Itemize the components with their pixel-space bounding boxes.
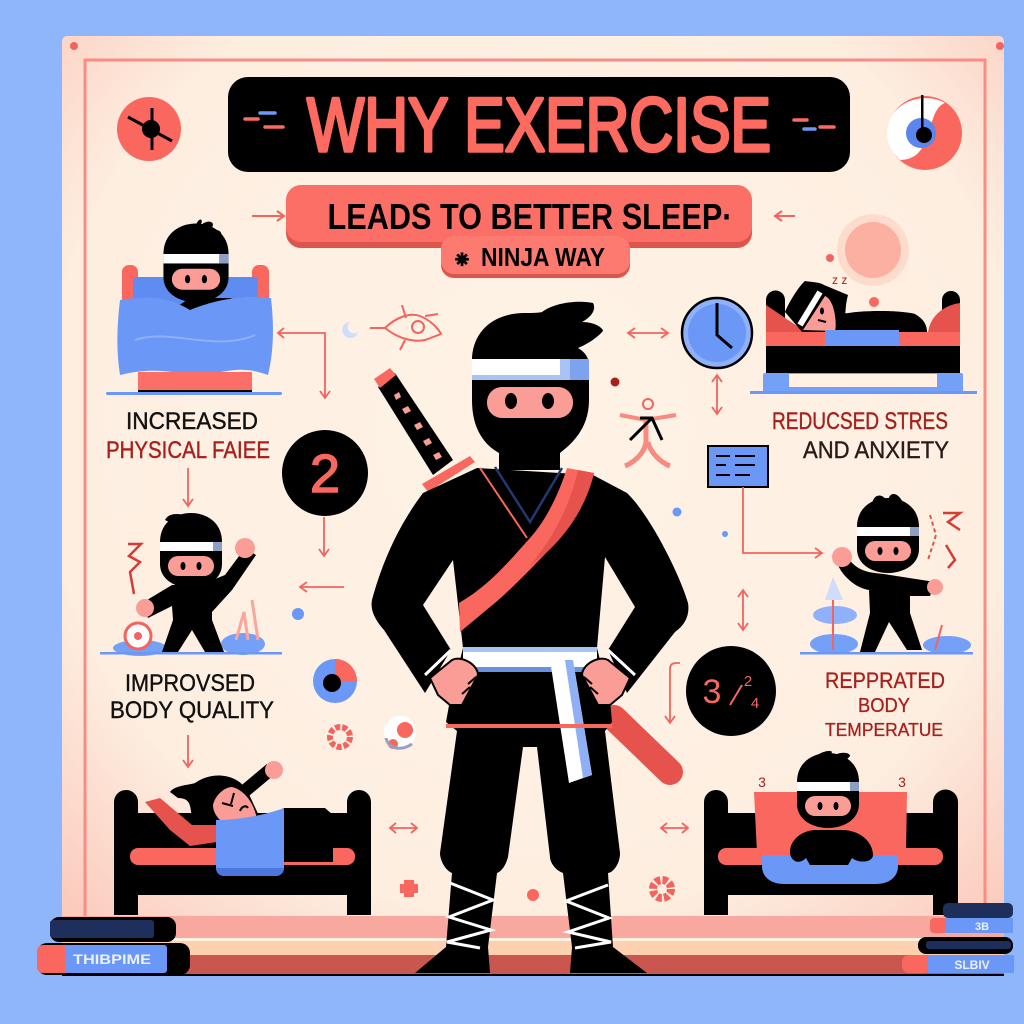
icon: right clock badge	[887, 95, 962, 170]
sword sheath	[614, 718, 670, 772]
subtitle banner: LEADS TO BETTER SLEEP·	[328, 196, 732, 237]
icon: gear left	[330, 727, 350, 747]
arrows: connectors	[183, 328, 822, 833]
text: reduced stress	[772, 408, 949, 464]
sash	[459, 468, 594, 632]
headband	[472, 359, 589, 380]
arrows: subtitle side	[252, 211, 795, 221]
figure: small ninja acrobat	[620, 399, 676, 466]
illustration: bottom-right bed	[704, 751, 958, 915]
text: reduced stress: REDUCSED STRES	[772, 408, 948, 435]
katana on back	[374, 368, 475, 492]
book stack: right: 3B	[975, 921, 989, 933]
text: increased physical fatigue	[106, 408, 270, 464]
icon: left clock badge	[117, 97, 181, 161]
text: increased physical fatigue: PHYSICAL FAIEE	[106, 437, 270, 464]
icon: monitor	[708, 446, 768, 487]
text: reduced stress: AND ANXIETY	[803, 437, 949, 464]
icon: eye	[370, 305, 441, 350]
belt	[463, 647, 597, 672]
icon: sun	[837, 214, 909, 286]
illustration: top-right ninja in bed	[750, 273, 977, 394]
illustration: bottom-left bed	[114, 761, 371, 915]
face	[487, 387, 573, 418]
title banner: WHY EXERCISE	[307, 83, 771, 168]
text: increased physical fatigue: INCREASED	[126, 408, 258, 435]
text: regulated body temperature: BODY	[858, 695, 910, 717]
badge: fraction	[686, 646, 776, 736]
badge: number 2	[282, 430, 368, 516]
illustration: mid-left ninja	[100, 513, 282, 656]
icon: gear right	[653, 880, 671, 898]
decorative dots	[292, 322, 728, 901]
icon: small red dot	[826, 254, 834, 262]
body and arms	[372, 468, 688, 973]
icon: donut chart	[313, 659, 357, 703]
badge: fraction: 4	[751, 695, 759, 712]
badge: fraction: 3	[703, 673, 721, 711]
illustration: bottom-right bed: 3	[758, 774, 766, 790]
illustration: bottom-right bed: 3	[898, 774, 906, 790]
tag: ninja way: ⁕	[452, 247, 472, 274]
icon: small ball	[384, 716, 416, 749]
book stack: right	[902, 903, 1014, 973]
illustration: top-right ninja in bed: z z	[832, 273, 847, 287]
tag: ninja way	[441, 236, 630, 278]
icon: clock	[682, 298, 752, 368]
text: regulated body temperature	[825, 668, 945, 740]
text: regulated body temperature: REPPRATED	[825, 668, 945, 693]
subtitle banner	[286, 185, 752, 248]
text: improved body quality: BODY QUALITY	[110, 697, 274, 724]
collar	[480, 468, 527, 538]
tag: ninja way: NINJA WAY	[481, 242, 605, 272]
figure: central ninja	[372, 302, 688, 973]
book stack: right: SLBIV	[954, 958, 990, 972]
text: regulated body temperature: TEMPERATUE	[825, 720, 943, 740]
book stack: left	[37, 917, 190, 975]
illustration: top-left ninja in bed	[106, 220, 282, 395]
book stack: left: THIBPIME	[73, 951, 151, 967]
badge: fraction: 2	[744, 673, 752, 690]
text: improved body quality: IMPROVSED	[125, 670, 255, 697]
illustration: mid-right ninja	[800, 494, 973, 654]
leg wraps	[447, 883, 611, 948]
text: improved body quality	[110, 670, 274, 724]
hands	[430, 659, 478, 705]
badge: number 2: 2	[310, 444, 340, 504]
head	[472, 302, 603, 470]
